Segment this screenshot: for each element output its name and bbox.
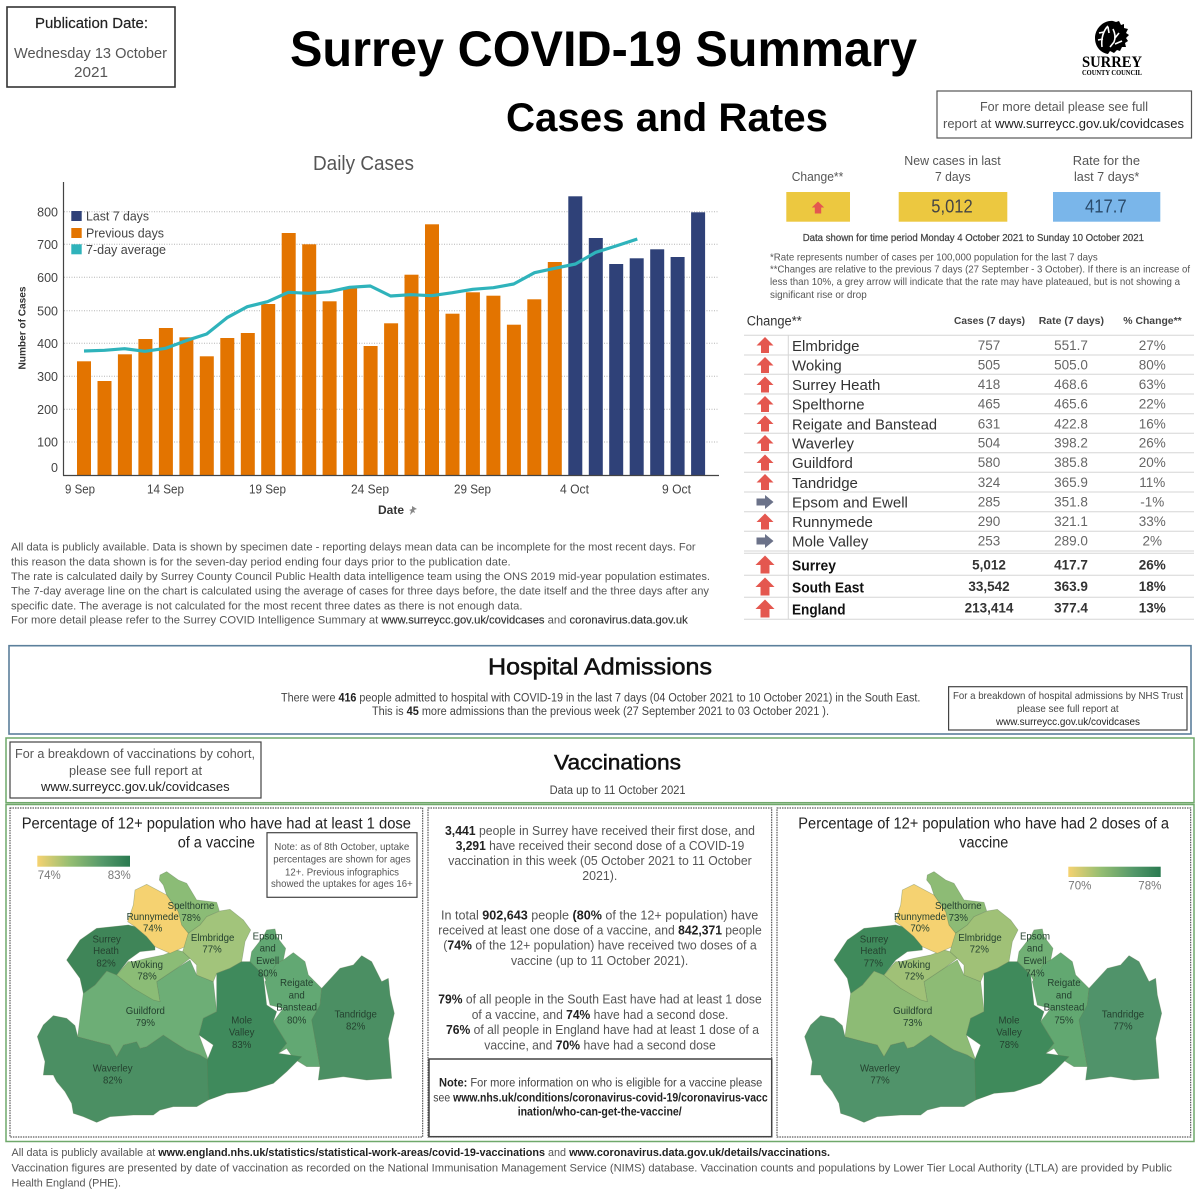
note: vaccine eligibility: Note: For more information on who is eligible for a vaccine please	[439, 1078, 762, 1090]
table rows: districts: Waverley	[792, 436, 854, 453]
x axis labels	[65, 482, 692, 496]
x axis labels: 29 Sep	[454, 482, 491, 496]
logo: Surrey County Council: COUNTY COUNCIL	[1082, 68, 1142, 77]
panel: vaccination summary text	[428, 808, 772, 1137]
colour legend: second dose: 70%	[1068, 880, 1091, 892]
table header: % Change**	[1123, 315, 1183, 327]
note: uptake ages: percentages are shown for ages	[273, 854, 411, 866]
table rows: totals: 417.7	[1054, 557, 1088, 572]
colour legend: first dose: 83%	[108, 870, 131, 882]
map labels: second dose: Mole	[999, 1015, 1019, 1026]
table rows: districts	[792, 338, 1166, 551]
chart notes text: The rate is calculated daily by Surrey County Council Public Health data intelligence team using the ONS 2019 mid-year population estimates.	[11, 571, 710, 583]
table header	[747, 314, 1183, 329]
table rows: districts: 422.8	[1054, 416, 1088, 431]
map labels: first dose	[92, 901, 377, 1086]
table rows: districts: Spelthorne	[792, 397, 865, 414]
map labels: second dose: Runnymede	[894, 912, 946, 923]
map labels: second dose: 77%	[864, 959, 883, 970]
text: total doses: (74% of the 12+ population) have received two doses of a	[443, 937, 757, 952]
map labels: first dose: and	[289, 990, 305, 1001]
choropleth map: first dose by district	[37, 872, 394, 1122]
map labels: first dose: Valley	[229, 1028, 255, 1039]
map labels: second dose: 72%	[905, 972, 924, 983]
rate footnotes: significant rise or drop	[770, 290, 867, 301]
y axis labels: 500	[37, 304, 58, 318]
chart legend: Last 7 days	[86, 210, 149, 224]
y axis labels: 300	[37, 370, 58, 384]
note: vaccine eligibility: ination/who-can-get-the-vaccine/	[518, 1107, 682, 1119]
more detail callout: report at www.surreycc.gov.uk/covidcases	[943, 116, 1184, 131]
map labels: first dose: Heath	[93, 946, 119, 957]
line: 7-day average	[84, 239, 637, 351]
panel: headline KPIs: Change**	[792, 169, 843, 184]
table rows: districts: 504	[978, 436, 1001, 451]
map labels: second dose: Woking	[898, 960, 930, 971]
rate footnotes: *Rate represents number of cases per 100,000 population for the last 7 days	[770, 253, 1098, 264]
map labels: first dose: Guildford	[126, 1006, 165, 1017]
bars: previous days	[77, 224, 562, 475]
note: uptake ages: 12+. Previous infographics	[285, 866, 399, 878]
table rows: districts: Reigate and Banstead	[792, 416, 937, 433]
x axis labels: 9 Oct	[662, 482, 692, 496]
text: weekly doses	[445, 823, 755, 883]
table rows: districts: Epsom and Ewell	[792, 495, 908, 512]
y axis labels: 800	[37, 206, 58, 220]
heading: first dose: of a vaccine	[178, 834, 255, 851]
table header: Rate (7 days)	[1039, 315, 1104, 327]
text: total doses	[438, 907, 762, 968]
bars: last 7 days	[568, 196, 705, 475]
KPI: new cases	[899, 192, 1007, 222]
table rows: districts: Woking	[792, 357, 842, 374]
map labels: second dose: Valley	[996, 1028, 1022, 1039]
table rows: districts: 289.0	[1054, 534, 1088, 549]
chart heading: Daily Cases: Daily Cases	[313, 153, 414, 175]
panel: headline KPIs: last 7 days*	[1074, 169, 1139, 184]
table rows: districts: 631	[978, 416, 1000, 431]
data period note: Data shown for time period Monday 4 October 2021 to Sunday 10 October 2021	[803, 232, 1144, 244]
table rows: districts: 580	[978, 455, 1000, 470]
table rows: districts: 26%	[1139, 436, 1166, 451]
chart notes text: For more detail please refer to the Surrey COVID Intelligence Summary at www.surreycc.gov.uk/covidcases and coronavirus.data.gov.uk	[11, 615, 688, 627]
callout: cohort breakdown: www.surreycc.gov.uk/covidcases	[40, 779, 230, 794]
table rows: totals: 26%	[1139, 557, 1166, 572]
more detail callout: For more detail please see full	[980, 99, 1148, 114]
map labels: second dose: and	[1056, 990, 1072, 1001]
map labels: first dose: 78%	[181, 913, 201, 924]
x axis labels: 4 Oct	[560, 482, 590, 496]
panel: hospital admissions	[9, 646, 1191, 734]
table rows: districts: 365.9	[1054, 475, 1088, 490]
map labels: first dose: Epsom	[253, 931, 283, 942]
map labels: second dose: Surrey	[860, 934, 888, 945]
map labels: first dose: Woking	[131, 960, 163, 971]
table rows: totals: 18%	[1139, 579, 1166, 594]
map labels: second dose: Reigate	[1047, 978, 1081, 989]
y axis labels: 100	[37, 436, 58, 450]
y axis labels: 0	[51, 461, 58, 475]
map labels: second dose: 77%	[870, 1075, 890, 1086]
table rows: districts: 385.8	[1054, 455, 1088, 470]
map labels: first dose: 78%	[137, 972, 157, 983]
arrows: change indicators	[755, 337, 775, 617]
publication date box: Wednesday 13 October	[14, 45, 167, 62]
callout: NHS trust breakdown: www.surreycc.gov.uk/covidcases	[995, 716, 1140, 728]
map labels: first dose: 79%	[136, 1018, 155, 1029]
text: total doses: In total 902,643 people (80% of the 12+ population) have	[441, 907, 758, 922]
text: weekly doses: vaccination in this week (05 October 2021 to 11 October	[448, 853, 752, 868]
map labels: second dose: Elmbridge	[958, 933, 1002, 944]
table rows: districts: Surrey Heath	[792, 377, 880, 394]
note: vaccine eligibility	[429, 1059, 772, 1137]
chart notes text	[11, 542, 710, 627]
panel: vaccinations header	[6, 738, 1194, 803]
map labels: second dose: 78%	[999, 1040, 1019, 1051]
colour legend: second dose	[1068, 867, 1161, 892]
map labels: first dose: 77%	[202, 945, 222, 956]
panel: first dose map	[10, 808, 423, 1137]
text: regional comparison	[438, 992, 762, 1052]
rate footnotes: less than 10%, a grey arrow will indicate that the rate may have plateaued, but is not showing a	[770, 277, 1180, 288]
table rows: districts: 11%	[1139, 475, 1165, 490]
table rows: totals: 13%	[1139, 601, 1166, 616]
map labels: second dose: Banstead	[1044, 1003, 1084, 1014]
heading: second dose: vaccine	[959, 834, 1008, 851]
chart legend	[71, 210, 166, 257]
table rows: totals	[792, 557, 1166, 618]
table rows: districts: Elmbridge	[792, 338, 860, 355]
footer notes: Health England (PHE).	[12, 1178, 121, 1190]
hospital admissions text: There were 416 people admitted to hospital with COVID-19 in the last 7 days (04 October 2021 to 10 October 2021) in the South East.	[281, 693, 920, 705]
map labels: first dose: 74%	[143, 924, 163, 935]
table rows: districts: 27%	[1139, 338, 1166, 353]
text: regional comparison: 79% of all people in the South East have had at least 1 dose	[438, 992, 762, 1007]
table rows: totals: 33,542	[968, 579, 1010, 594]
table rows: districts: 63%	[1139, 377, 1166, 392]
chart legend: Previous days	[86, 227, 164, 241]
table rows: districts: -1%	[1140, 495, 1164, 510]
title: Surrey COVID-19 Summary	[290, 21, 917, 77]
chart legend: 7-day average	[86, 243, 166, 257]
table rows: districts: Tandridge	[792, 475, 858, 492]
table rows: districts: 321.1	[1054, 514, 1088, 529]
text: total doses: vaccine (up to 11 October 2021).	[511, 953, 688, 968]
map labels: second dose: 70%	[910, 924, 930, 935]
logo: Surrey County Council	[1082, 21, 1142, 77]
map labels: second dose: 77%	[1113, 1022, 1133, 1033]
callout: cohort breakdown	[10, 742, 261, 798]
text: regional comparison: vaccine, and 70% have had a second dose	[484, 1037, 716, 1052]
map labels: first dose: 82%	[96, 959, 116, 970]
footer notes	[12, 1147, 1173, 1190]
heading: second dose: Percentage of 12+ population who have had 2 doses of a	[798, 815, 1169, 832]
table rows: districts: 33%	[1139, 514, 1166, 529]
x axis title: Date	[378, 503, 404, 517]
table rows: districts: 2%	[1143, 534, 1162, 549]
map labels: second dose: 72%	[970, 945, 989, 956]
map labels: second dose: Spelthorne	[935, 901, 982, 912]
hospital admissions text: This is 45 more admissions than the previous week (27 September 2021 to 03 October 2021 ).	[372, 706, 829, 718]
chart notes text: The 7-day average line on the chart is calculated using the average of cases for three days before, the date itself and the three days after any	[11, 586, 710, 598]
y axis labels: 200	[37, 403, 58, 417]
table rows: districts: 285	[978, 495, 1000, 510]
table rows: districts: 551.7	[1054, 338, 1088, 353]
map labels: second dose: 73%	[903, 1018, 923, 1029]
x axis labels: 9 Sep	[65, 482, 95, 496]
map labels: first dose: Mole	[231, 1015, 252, 1026]
panel: vaccination maps frame	[6, 804, 1194, 1142]
map labels: second dose: Waverley	[860, 1064, 900, 1075]
map labels: second dose: 73%	[949, 913, 968, 924]
bar chart: daily cases	[16, 182, 719, 517]
panel: second dose map	[777, 808, 1191, 1137]
table rows: totals: 5,012	[972, 557, 1006, 572]
heading: hospital admissions: Hospital Admissions	[488, 654, 712, 680]
data date: Data up to 11 October 2021	[550, 785, 686, 797]
map labels: second dose: 75%	[1054, 1015, 1074, 1026]
note: uptake ages: Note: as of 8th October, uptake	[274, 841, 409, 853]
more detail callout	[937, 91, 1192, 138]
heading: first dose	[22, 815, 411, 851]
publication date box: Publication Date:	[35, 15, 148, 32]
y axis title: Number of Cases	[16, 286, 28, 370]
table rows: districts: 22%	[1139, 397, 1166, 412]
map labels: second dose: Guildford	[893, 1006, 932, 1017]
publication date box: 2021	[74, 64, 108, 81]
map labels: first dose: Elmbridge	[191, 933, 234, 944]
heading: vaccinations: Vaccinations	[554, 752, 681, 774]
table rows: districts: 253	[978, 534, 1000, 549]
subtitle: Cases and Rates	[506, 96, 828, 140]
map labels: second dose: and	[1027, 944, 1043, 955]
table header: Change**	[747, 314, 802, 329]
map labels: second dose: Epsom	[1020, 931, 1050, 942]
table rows: districts: 290	[978, 514, 1000, 529]
table rows: totals: 377.4	[1054, 601, 1088, 616]
callout: NHS trust breakdown	[949, 687, 1187, 730]
callout: NHS trust breakdown: For a breakdown of hospital admissions by NHS Trust	[953, 690, 1183, 702]
map labels: second dose: Ewell	[1023, 956, 1047, 967]
table rows: totals: England	[792, 601, 846, 618]
choropleth map: second dose by district	[805, 872, 1162, 1122]
callout: NHS trust breakdown: please see full report at	[1017, 703, 1119, 715]
y axis labels: 700	[37, 238, 58, 252]
text: regional comparison: of a vaccine, and 74% have had a second dose.	[472, 1007, 728, 1022]
publication date box	[7, 7, 175, 87]
table rows: districts: 465.6	[1054, 397, 1088, 412]
note: uptake ages	[267, 833, 417, 897]
table rows: totals: Surrey	[792, 558, 837, 575]
panel: headline KPIs: New cases in last	[904, 153, 1001, 168]
footer notes: All data is publicly available at www.england.nhs.uk/statistics/statistical-work-areas/covid-19-vaccinations and www.coronavirus.data.gov.uk/details/vaccinations.	[12, 1147, 830, 1159]
map labels: first dose: Banstead	[276, 1003, 317, 1014]
callout: cohort breakdown: please see full report at	[69, 763, 202, 778]
map labels: second dose: Tandridge	[1102, 1010, 1144, 1021]
table rows: districts: Mole Valley	[792, 534, 869, 551]
table rows: districts: 398.2	[1054, 436, 1088, 451]
map labels: first dose: Surrey	[92, 934, 121, 945]
map labels: first dose: Tandridge	[334, 1010, 377, 1021]
table rows: districts: 351.8	[1054, 495, 1088, 510]
logo: Surrey County Council: SURREY	[1082, 54, 1142, 71]
x axis labels: 19 Sep	[249, 482, 286, 496]
table rows: districts: 324	[978, 475, 1001, 490]
table rows: districts: 757	[978, 338, 1000, 353]
x axis title	[378, 503, 417, 517]
colour legend: first dose: 74%	[38, 870, 61, 882]
note: vaccine eligibility: see www.nhs.uk/conditions/coronavirus-covid-19/coronavirus-vacc	[433, 1093, 768, 1105]
table rows: totals: South East	[792, 579, 864, 596]
text: weekly doses: 3,441 people in Surrey have received their first dose, and	[445, 823, 755, 838]
y axis labels: 400	[37, 337, 58, 351]
text: weekly doses: 2021).	[582, 868, 617, 883]
table: cases by district	[744, 314, 1194, 619]
chart notes text: this reason the data shown is for the seven-day period ending four days prior to the publication date.	[11, 556, 511, 568]
table rows: districts: 20%	[1139, 455, 1166, 470]
map labels: first dose: Spelthorne	[168, 901, 214, 912]
heading: second dose	[798, 815, 1169, 851]
hospital admissions text	[281, 693, 920, 718]
table rows: districts: 465	[978, 397, 1000, 412]
map labels: second dose: Heath	[860, 946, 886, 957]
KPI: rate	[1053, 192, 1160, 222]
table rows: totals: 213,414	[965, 601, 1014, 616]
chart notes text: specific date. The average is not calculated for the most recent three dates as there is not enough data.	[11, 600, 522, 612]
x axis labels: 24 Sep	[351, 482, 389, 496]
table rows: districts: Runnymede	[792, 514, 873, 531]
KPI: new cases: 5,012	[931, 197, 973, 217]
panel: headline KPIs: Rate for the	[1073, 153, 1140, 168]
map labels: first dose: 82%	[103, 1075, 123, 1086]
table rows: districts: 468.6	[1054, 377, 1088, 392]
KPI: rate: 417.7	[1085, 197, 1127, 217]
footer notes: Vaccination figures are presented by date of vaccination as recorded on the National Immunisation Management Service (NIMS) database. Vaccination counts and populations by Lower Tier Local Authority (LTLA) are provided by Public	[12, 1162, 1173, 1174]
table rows: districts: 418	[978, 377, 1000, 392]
map labels: first dose: Reigate	[280, 978, 313, 989]
chart notes text: All data is publicly available. Data is shown by specimen date - reporting delays mean data can be incomplete for the most recent days. For	[11, 542, 696, 554]
table rows: totals: 363.9	[1054, 579, 1088, 594]
map labels: first dose: 80%	[287, 1015, 307, 1026]
y axis labels	[37, 206, 58, 475]
callout: cohort breakdown: For a breakdown of vaccinations by cohort,	[15, 746, 255, 761]
heading: first dose: Percentage of 12+ population who have had at least 1 dose	[22, 815, 411, 832]
map labels: first dose: 83%	[232, 1040, 252, 1051]
rate footnotes	[770, 253, 1190, 301]
map labels: first dose: Runnymede	[127, 912, 179, 923]
table rows: districts: Guildford	[792, 455, 853, 472]
panel: headline KPIs	[786, 153, 1160, 222]
text: total doses: received at least one dose of a vaccine, and 842,371 people	[438, 922, 762, 937]
table rows: districts: 505	[978, 357, 1000, 372]
text: regional comparison: 76% of all people in England have had at least 1 dose of a	[446, 1022, 760, 1037]
table header: Cases (7 days)	[954, 315, 1025, 327]
colour legend: second dose: 78%	[1138, 880, 1161, 892]
table rows: districts: 80%	[1139, 357, 1166, 372]
note: uptake ages: showed the uptakes for ages 16+	[271, 878, 413, 890]
x axis labels: 14 Sep	[147, 482, 184, 496]
KPI: change	[786, 192, 850, 222]
map labels: first dose: 80%	[258, 969, 278, 980]
map labels: first dose: Waverley	[93, 1064, 133, 1075]
map labels: first dose: 82%	[346, 1022, 366, 1033]
colour legend: first dose	[37, 856, 131, 882]
table rows: districts: 16%	[1139, 416, 1166, 431]
table rows: districts: 505.0	[1054, 357, 1088, 372]
y axis labels: 600	[37, 271, 58, 285]
map labels: second dose	[860, 901, 1144, 1086]
panel: headline KPIs: 7 days	[935, 169, 971, 184]
map labels: first dose: and	[260, 944, 276, 955]
text: weekly doses: 3,291 have received their second dose of a COVID-19	[456, 838, 744, 853]
map labels: first dose: Ewell	[256, 956, 279, 967]
map labels: second dose: 74%	[1025, 969, 1045, 980]
